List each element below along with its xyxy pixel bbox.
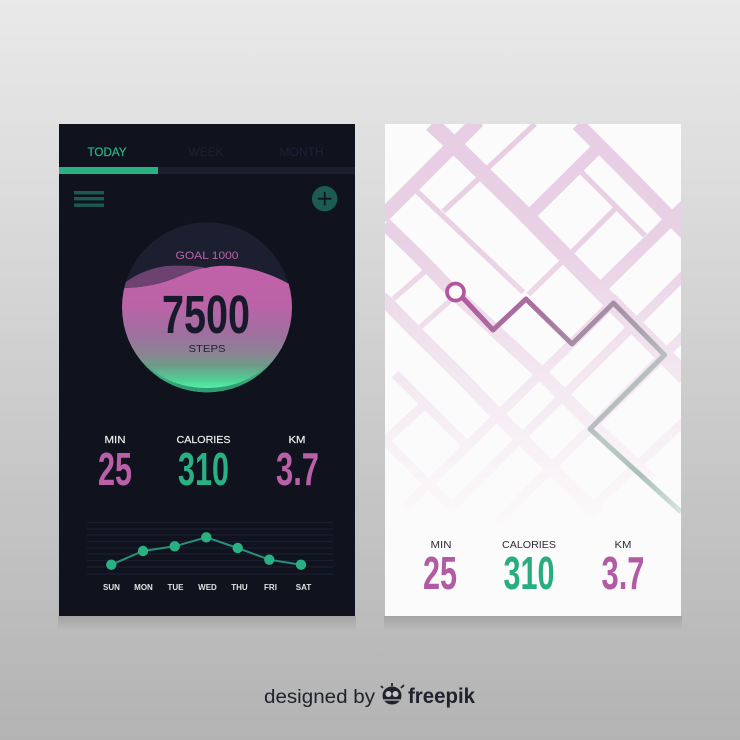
day labels: THU xyxy=(231,583,248,592)
line chart xyxy=(87,522,333,592)
route line xyxy=(463,298,681,512)
stat: calories: 310 xyxy=(178,443,229,495)
steps label: STEPS xyxy=(188,343,226,355)
stat: min: MIN xyxy=(104,434,126,446)
stat: min: 25 xyxy=(98,443,132,495)
stat: km xyxy=(276,434,319,495)
goal label: GOAL 1000 xyxy=(176,250,238,262)
panel shadows xyxy=(58,616,682,631)
day labels: MON xyxy=(134,583,153,592)
tab: week: WEEK xyxy=(188,147,224,159)
day labels: WED xyxy=(198,583,217,592)
icon: start marker xyxy=(447,284,464,300)
stat: min xyxy=(98,434,132,495)
stats row xyxy=(98,434,319,495)
icon: menu xyxy=(74,191,104,207)
stat: min: MIN xyxy=(430,540,452,551)
stat: km: KM xyxy=(288,434,306,446)
credit: designed by freepik: designed by xyxy=(264,686,375,708)
map roads xyxy=(385,124,681,464)
green rim xyxy=(144,364,270,392)
panel: route map xyxy=(382,121,688,616)
tab: month: MONTH xyxy=(280,147,324,159)
icon: add button xyxy=(312,186,337,211)
stat: min xyxy=(423,540,457,599)
stat: calories: CALORIES xyxy=(502,540,556,551)
day labels: TUE xyxy=(168,583,184,592)
stat: calories: CALORIES xyxy=(176,434,230,446)
day labels xyxy=(103,583,311,592)
back wave xyxy=(120,266,206,288)
credit: designed by freepik: freepik xyxy=(408,685,475,708)
stat: calories: 310 xyxy=(504,547,554,599)
stat: km: 3.7 xyxy=(276,443,319,495)
tab: today: TODAY xyxy=(88,147,127,159)
day labels: SAT xyxy=(296,583,311,592)
liquid fill xyxy=(120,266,296,395)
stat: km xyxy=(602,540,644,599)
credit: designed by freepik xyxy=(264,683,475,708)
day labels: SUN xyxy=(103,583,120,592)
panel: activity dashboard xyxy=(59,124,355,616)
day labels: FRI xyxy=(264,583,277,592)
stat: km: 3.7 xyxy=(602,547,644,599)
icon: freepik mascot xyxy=(381,683,404,704)
step count: 7500 xyxy=(162,285,250,345)
stat: min: 25 xyxy=(423,547,457,599)
stat: calories xyxy=(502,540,556,599)
stat: calories xyxy=(176,434,230,495)
stat: km: KM xyxy=(614,540,632,551)
step goal gauge xyxy=(122,222,292,392)
tab progress bar xyxy=(59,167,355,174)
map fade xyxy=(385,272,681,530)
